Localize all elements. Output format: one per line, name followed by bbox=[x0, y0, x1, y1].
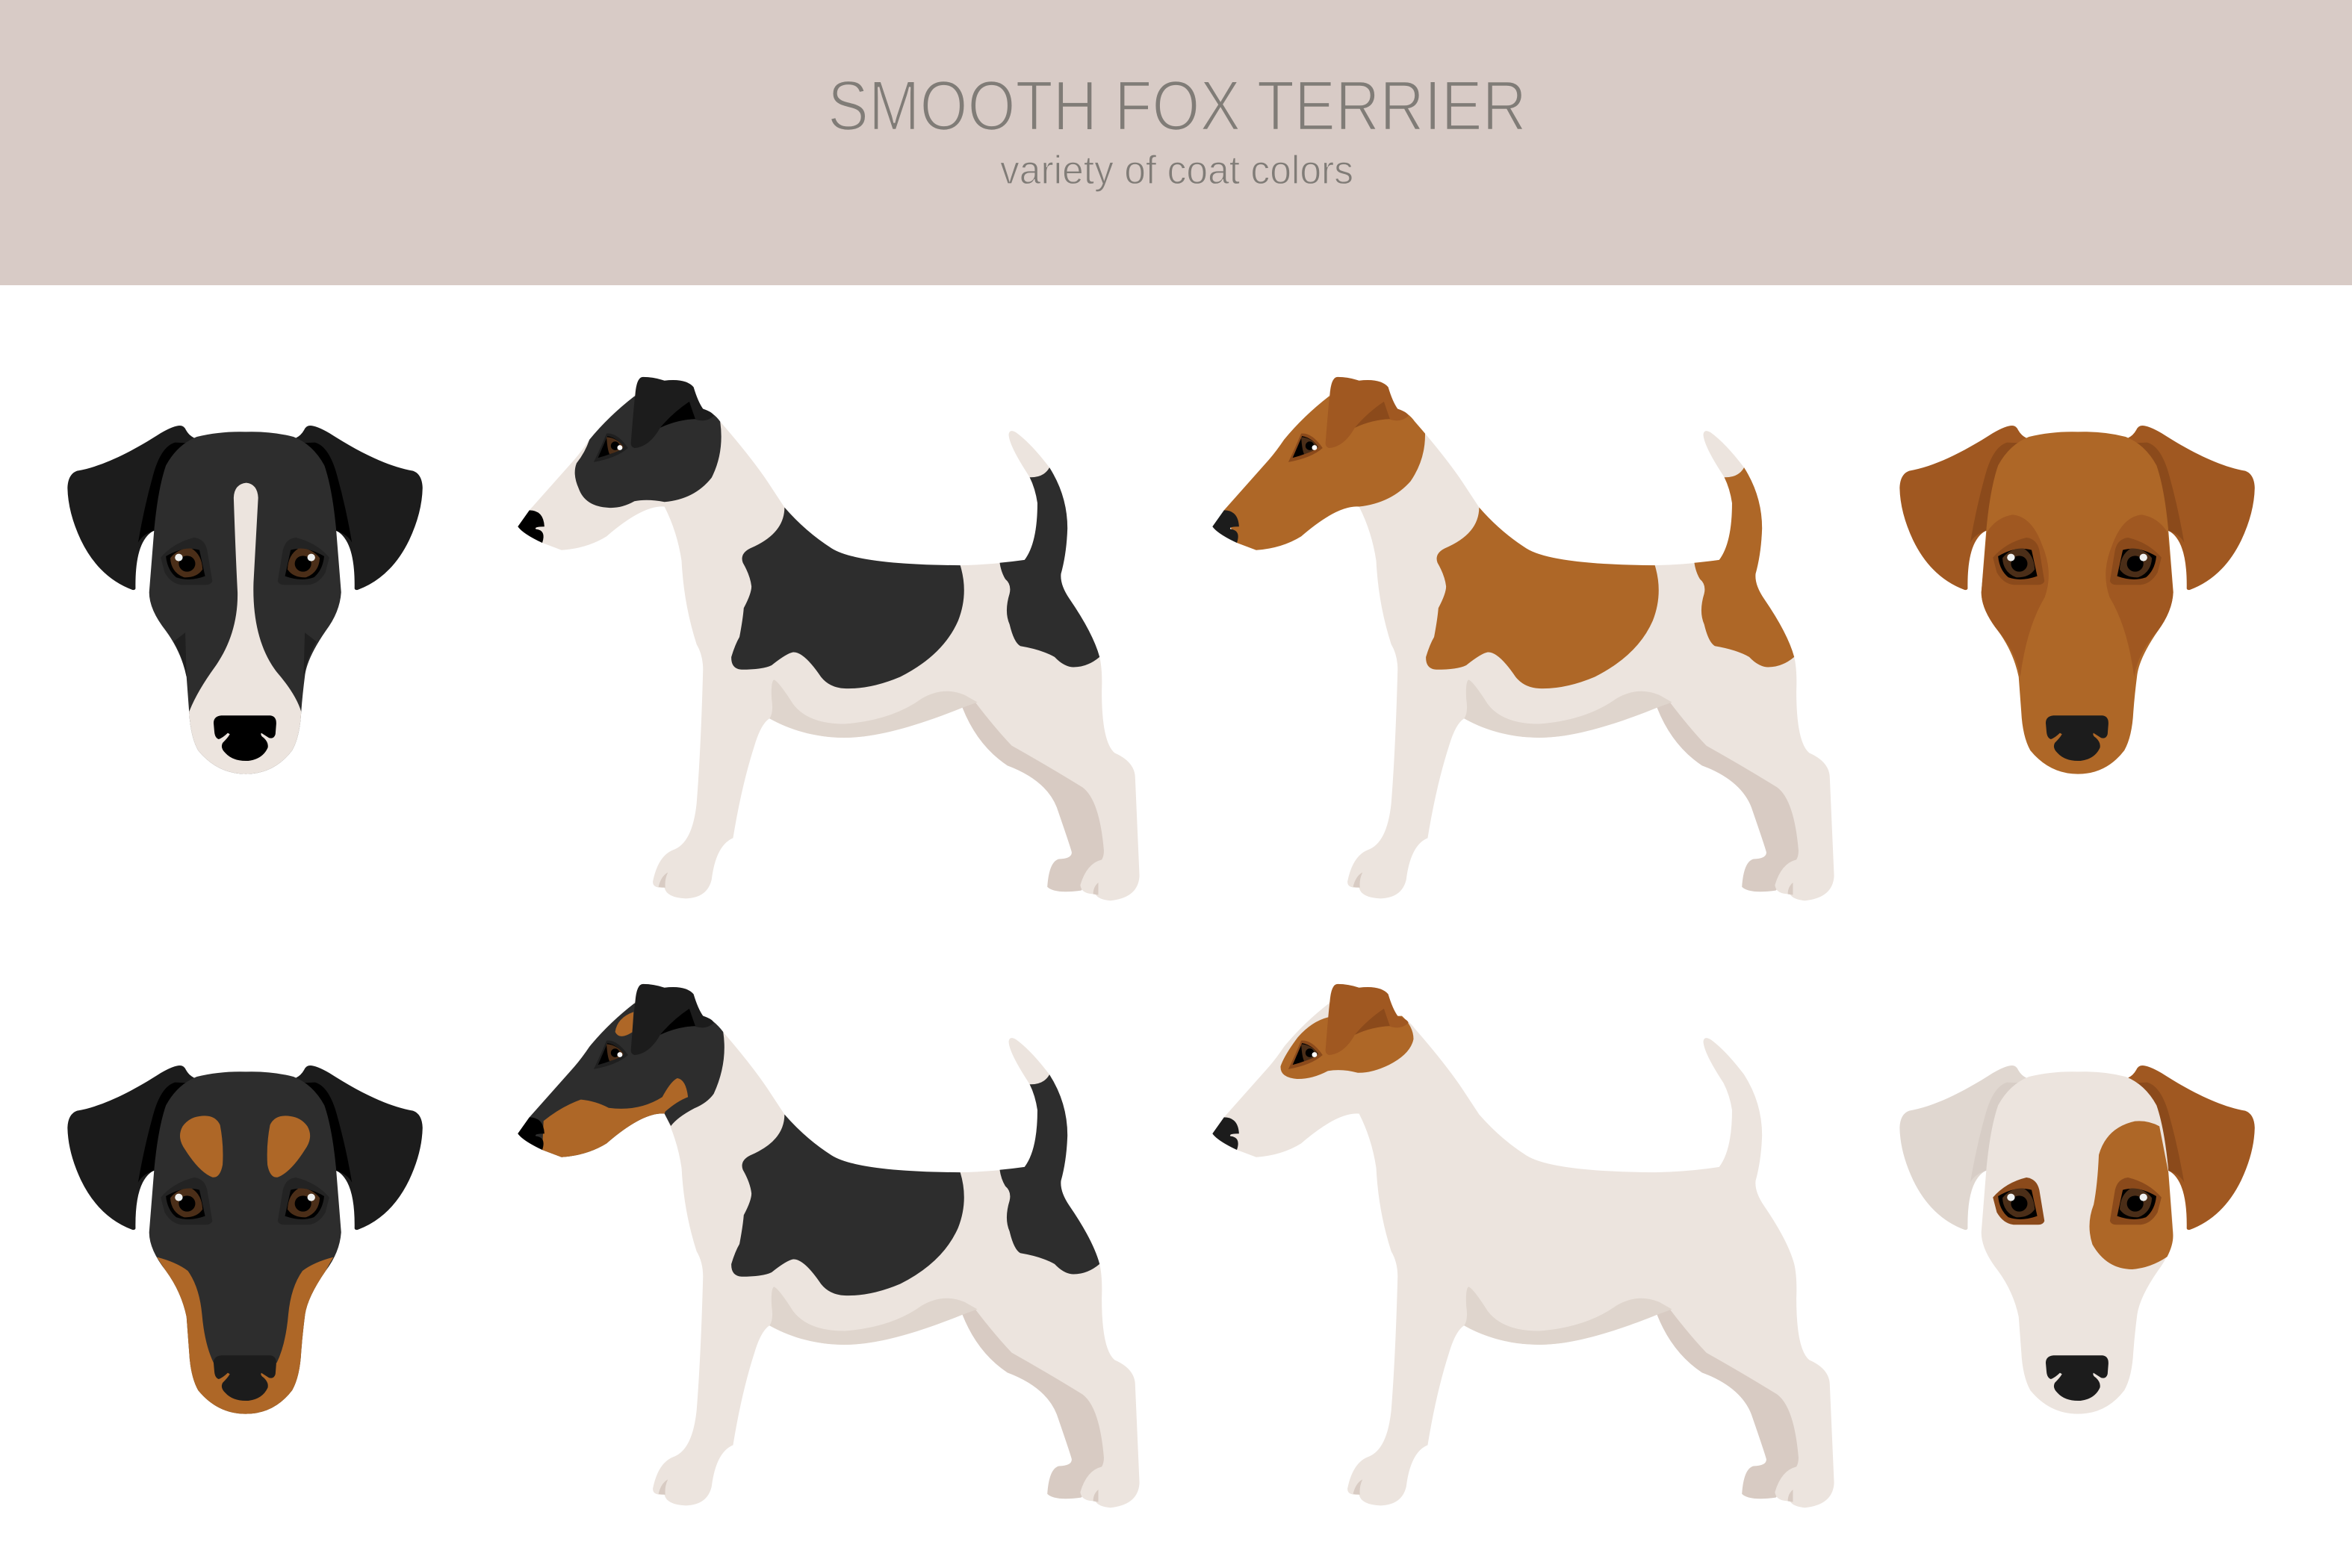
head: tan brown bbox=[1899, 426, 2255, 774]
head: white with tan eye patch bbox=[1899, 1065, 2255, 1414]
dog: white with tan head patch side view bbox=[1212, 984, 1834, 1508]
title: SMOOTH FOX TERRIER bbox=[828, 66, 1527, 146]
head: black and white bbox=[67, 426, 423, 774]
dog: tan and white side view bbox=[1212, 377, 1834, 900]
head: black and tan bbox=[67, 1065, 423, 1414]
dog: tricolor side view bbox=[518, 984, 1140, 1508]
dog: black and white side view bbox=[518, 377, 1140, 900]
header band bbox=[0, 0, 2352, 285]
subtitle: variety of coat colors bbox=[1000, 148, 1353, 193]
